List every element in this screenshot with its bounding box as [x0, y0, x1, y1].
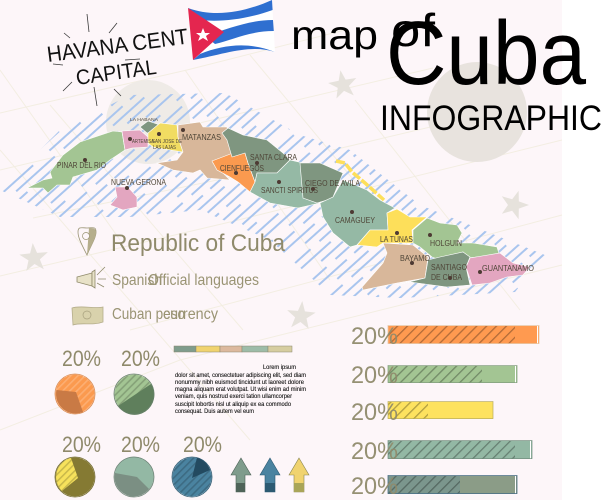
arrow: grey green: [231, 458, 251, 492]
province: Pinar del Rio: [27, 131, 125, 193]
bar percent labels: 20%: [351, 473, 398, 500]
decorative stars: [18, 68, 532, 329]
lorem ipsum text block: nonummy nibh euismod tincidunt ut laoreet dolore: [175, 379, 304, 386]
decorative circle right: [427, 62, 527, 162]
map city labels: LA HABANA: [130, 117, 158, 122]
lorem ipsum text block: consequat. Duis autem vel eum: [175, 408, 254, 415]
province: Villa Clara: [222, 128, 290, 182]
map city labels: CAMAGUEY: [335, 216, 376, 225]
province: Granma: [362, 243, 428, 290]
callout: Havana Cent: HAVANA CENT: [45, 24, 189, 67]
pie chart: green: [114, 374, 154, 415]
sea hatching: [0, 93, 545, 298]
pie chart: orange: [55, 374, 95, 414]
map city labels: SANCTI SPIRITUS: [261, 186, 318, 195]
map city dots: [83, 128, 482, 280]
bar: grey blue: [388, 476, 517, 494]
province: Isla de la Juventud: [110, 187, 137, 210]
map city labels: LA TUNAS: [380, 235, 413, 244]
pie chart: olive: [55, 457, 95, 497]
heading: Republic of Cuba: Republic of Cuba: [111, 230, 286, 257]
lorem ipsum text block: Lorem ipsum: [263, 364, 296, 371]
pie percent labels: [62, 346, 222, 457]
lorem ipsum text block: [175, 364, 306, 415]
map city labels: GUANTANAMO: [482, 264, 534, 273]
map city labels: DE CUBA: [431, 273, 463, 282]
map city labels: SAN JOSE DE: [152, 139, 183, 145]
bar percent labels: 20%: [351, 399, 398, 426]
label: Official languages: Official languages: [148, 272, 259, 289]
map city labels: BAYAMO: [400, 254, 430, 263]
pie percent labels: 20%: [62, 432, 101, 457]
map of Cuba: [27, 121, 530, 290]
callout: Capital: CAPITAL: [74, 56, 158, 90]
province: Camaguey: [320, 180, 395, 247]
map city labels: HOLGUIN: [430, 239, 462, 248]
map city labels: MATANZAS: [182, 133, 221, 142]
icon: megaphone: [77, 267, 106, 288]
pie chart: blue: [172, 457, 212, 497]
sunburst around callout: [53, 14, 140, 106]
map city labels: SANTA CLARA: [250, 153, 298, 162]
map city labels: NUEVA GERONA: [111, 178, 167, 187]
lorem ipsum text block: magna aliquam erat volutpat. Ut wisi enim ad minim: [175, 386, 306, 393]
province: Artemisa: [122, 130, 148, 150]
map city labels: LAS LAJAS: [153, 145, 177, 151]
bar percent labels: [351, 323, 398, 500]
province: Las Tunas: [357, 209, 427, 247]
province: Matanzas: [157, 122, 232, 180]
province: Ciego de Avila: [300, 163, 343, 203]
icon: Cuban flag: [188, 0, 275, 60]
map city labels: CIEGO DE AVILA: [305, 179, 361, 188]
text: Spanish: Spanish: [112, 272, 162, 289]
map city labels: SANTIAGO: [431, 263, 467, 272]
lorem ipsum text block: suscipit lobortis nisl ut aliquip ex ea commodo: [175, 401, 291, 408]
lorem ipsum text block: dolor sit amet, consectetuer adipiscing elit, sed diam: [175, 372, 306, 379]
pie chart: grey green: [114, 457, 154, 497]
province: Santiago de Cuba: [397, 252, 470, 287]
bar: green: [388, 366, 517, 383]
bar: yellow: [388, 402, 493, 419]
bar: orange: [388, 326, 539, 344]
bar percent labels: 20%: [351, 323, 398, 350]
pie percent labels: 20%: [62, 346, 101, 371]
map city labels: ARTEMISA: [132, 139, 155, 145]
province: Guantanamo: [466, 253, 530, 285]
bar percent labels: 20%: [351, 362, 398, 389]
pie percent labels: 20%: [121, 432, 160, 457]
bar percent labels: 20%: [351, 438, 398, 465]
province: Holguin: [413, 218, 500, 260]
icon: map pin: [78, 228, 96, 255]
icon: banknote: [72, 307, 103, 325]
map city labels: PINAR DEL RIO: [57, 161, 106, 170]
label: currency: currency: [163, 306, 218, 323]
pie percent labels: 20%: [121, 346, 160, 371]
province: Cienfuegos: [212, 153, 255, 192]
northern keys: [336, 161, 384, 200]
title: of: of: [391, 4, 435, 56]
title: Cuba: Cuba: [386, 4, 587, 104]
arrow: yellow: [289, 458, 309, 492]
colour strip: [174, 346, 292, 352]
lorem ipsum text block: veniam, quis nostrud exerci tation ullamcorper: [175, 393, 292, 400]
map city labels: CIENFUEGOS: [220, 164, 264, 173]
province: Sancti Spiritus: [250, 160, 320, 208]
decorative circle left: [106, 80, 190, 164]
background grid lines: [0, 30, 562, 440]
text: Cuban peso: Cuban peso: [112, 306, 185, 323]
pie percent labels: 20%: [183, 432, 222, 457]
province: La Habana: [140, 121, 160, 133]
title: map: map: [291, 12, 378, 58]
map city labels: [57, 117, 534, 282]
arrow: blue: [260, 458, 280, 492]
province: Mayabeque: [148, 123, 183, 152]
bar: teal: [388, 440, 532, 459]
